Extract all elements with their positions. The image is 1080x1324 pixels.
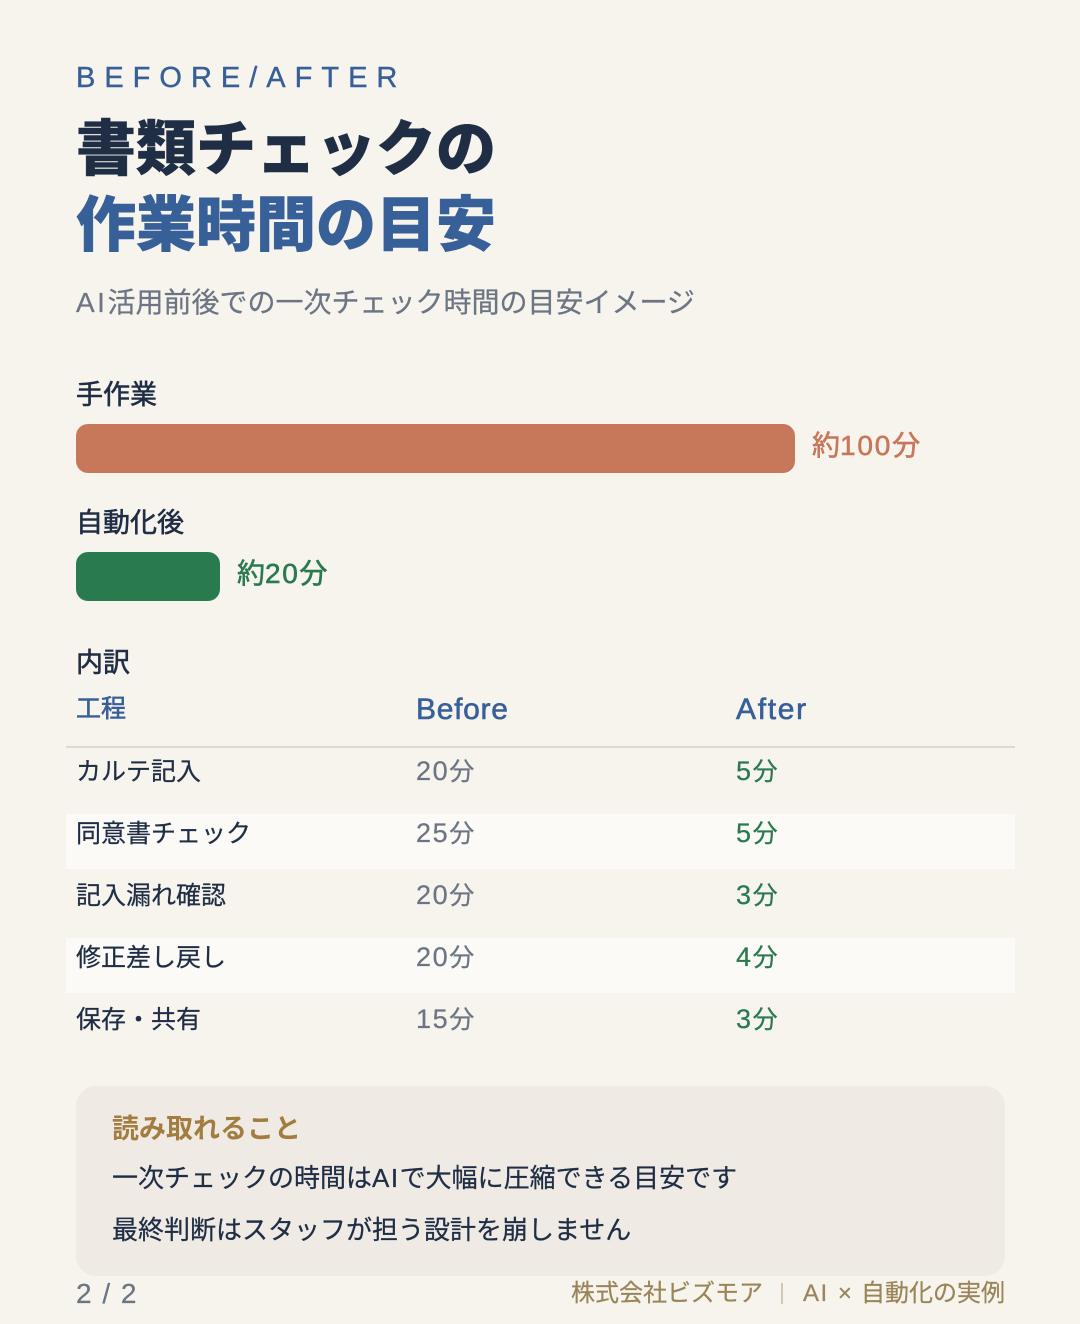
row 3 [76,880,778,910]
eyebrow: BEFORE/AFTER [76,62,406,94]
row 2: 5分 [736,818,778,848]
table: breakdown [66,693,1015,1034]
row 1 [76,756,778,786]
footer credit [571,1280,1005,1307]
company name: 株式会社ビズモア [571,1280,763,1307]
row 4 [66,938,1015,993]
subtitle: AI活用前後での一次チェック時間の目安イメージ [76,287,695,318]
row 5: 3分 [736,1004,778,1034]
chart: manual work [76,380,920,473]
title [76,116,496,259]
series label: AI × 自動化の実例 [803,1280,1005,1307]
row 2: 同意書チェック [76,820,251,848]
takeaway 2: 最終判断はスタッフが担う設計を崩しません [112,1215,631,1245]
separator [781,1283,783,1304]
chart: automated [76,508,328,601]
row 1: カルテ記入 [76,758,201,786]
row 5: 保存・共有 [76,1006,201,1034]
page number: 2 / 2 [76,1278,138,1309]
row 5: 15分 [416,1004,474,1034]
row 4: 4分 [736,942,778,972]
panel heading: 読み取れること [112,1114,301,1144]
panel: takeaways [76,1086,1005,1276]
value: manual: 約100分 [812,430,920,461]
row 3: 3分 [736,880,778,910]
row 2 [66,814,1015,869]
row 5 [76,1004,778,1034]
label: automated: 自動化後 [76,508,184,538]
header row: Before [416,693,509,726]
title: 作業時間の目安 [76,192,496,259]
title: 書類チェックの [76,116,496,183]
header row [66,693,1015,748]
row 4: 修正差し戻し [76,944,226,972]
value: automated: 約20分 [237,558,327,589]
bar: manual [76,424,795,473]
heading: breakdown: 内訳 [76,648,130,678]
header row: After [736,693,808,726]
label: manual: 手作業 [76,380,157,410]
header row: 工程 [76,695,126,723]
row 2: 25分 [416,818,474,848]
row 3: 記入漏れ確認 [76,882,226,910]
row 3: 20分 [416,880,474,910]
row 1: 5分 [736,756,778,786]
row 1: 20分 [416,756,474,786]
row 4: 20分 [416,942,474,972]
takeaway 1: 一次チェックの時間はAIで大幅に圧縮できる目安です [112,1163,737,1193]
bar: automated [76,552,220,601]
